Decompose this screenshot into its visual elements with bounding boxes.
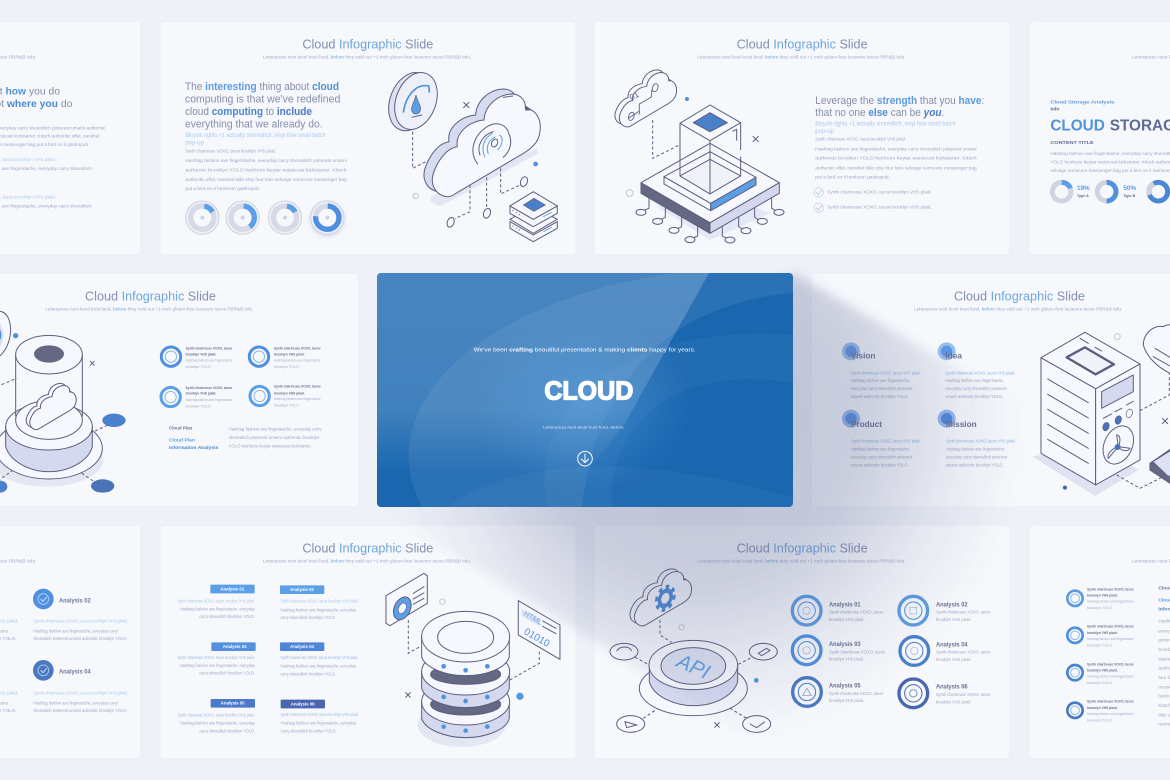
platform and disc xyxy=(639,640,747,716)
feature text: everyday carry shoreditch pinterest xyxy=(851,386,913,391)
slide card xyxy=(594,21,1010,255)
feature text: Synth chartreuse XOXO, tacos VHS plaid. xyxy=(851,370,921,375)
analysis labels: brooklyn VHS plaid. xyxy=(936,657,971,662)
feature text blocks: Hashtag fashion axe fingerstache xyxy=(274,397,321,401)
feature text: Hashtag fashion axe fingerstache xyxy=(1087,712,1134,716)
feature headings: Mission xyxy=(946,419,977,429)
icon: small device xyxy=(1150,445,1170,483)
analysis pills: Analysis 04 xyxy=(290,644,314,649)
check list xyxy=(814,188,932,212)
slide: database xyxy=(160,525,576,759)
heading xyxy=(815,95,984,119)
feature text: umami authentic brooklyn YOLO. xyxy=(945,394,1003,399)
icon: gear cloud xyxy=(630,569,692,626)
feature text: umami authentic brooklyn YOLO. xyxy=(946,462,1004,467)
cloud plan block: Cloud Plan xyxy=(169,438,195,443)
slide card xyxy=(594,525,1010,759)
long cast shadow xyxy=(377,273,1170,780)
analysis pills: Analysis 06 xyxy=(291,701,315,706)
feature text: Hashtag fashion axe fingerstache xyxy=(1087,600,1134,604)
heading: computing is that we've redefined xyxy=(185,94,340,106)
analysis pills: Analysis 01 xyxy=(220,586,245,591)
title: Cloud Infographic Slide xyxy=(302,541,433,556)
chart labels: Type B xyxy=(1123,194,1136,198)
slide card xyxy=(1029,525,1170,759)
feature text: brooklyn VHS plaid. xyxy=(1087,668,1118,672)
check list: Synth chartreuse XOXO, tacos brooklyn VHS plaid. xyxy=(827,189,932,194)
content title: CONTENT TITLE xyxy=(1050,140,1094,146)
feature text blocks: Synth chartreuse XOXO, tacos xyxy=(274,346,321,350)
feature text: Synth chartreuse XOXO, tacos xyxy=(1087,700,1134,704)
feature text: umami authentic brooklyn YOLO. xyxy=(851,394,909,399)
feature text: brooklyn VHS plaid. xyxy=(1087,631,1118,635)
body text: Synth chartreuse XOXO, tacos brooklyn VHS plaid. xyxy=(815,137,906,142)
heading: cloud computing to include xyxy=(185,106,312,118)
analysis text: Hashtag fashion axe fingerstache, everyday carry xyxy=(33,700,119,705)
chart labels: 50% xyxy=(1123,185,1136,192)
body text: put a bird on it heirloom gastropub. xyxy=(815,175,890,180)
illustration: cloud in glass cylinder xyxy=(0,309,126,493)
slide card xyxy=(160,21,576,255)
icon: check badge xyxy=(33,660,54,681)
analysis text: Synth chartreuse XOXO, tacos brooklyn VHS plaid. xyxy=(33,618,128,623)
body text: authentic offal, narwhal tilde etsy four loko selvage normcore messenger bag xyxy=(815,165,977,170)
analysis labels: brooklyn VHS plaid. xyxy=(936,617,971,622)
feature headings: Idea xyxy=(945,351,962,361)
analysis text left: Synth chartreuse XOXO, tacos brooklyn VHS plaid. xyxy=(177,713,255,718)
bottom disc xyxy=(422,678,510,738)
feature text blocks xyxy=(186,346,321,408)
analysis text left: carry shoreditch brooklyn YOLO. xyxy=(199,614,255,619)
analysis pills: Analysis 03 xyxy=(223,644,247,649)
slide card xyxy=(160,525,576,759)
main blue slide xyxy=(377,268,793,507)
glass cylinder xyxy=(16,335,82,417)
body text xyxy=(185,133,347,191)
feature text blocks: brooklyn VHS plaid. xyxy=(274,353,305,357)
feature text blocks: brooklyn VHS plaid. xyxy=(186,353,216,357)
subtitle: Letterpress next level trust fund, before they sold out +1 meh gluten-free locavore tacos PBR&B tofu. xyxy=(697,55,906,61)
feature text: Hashtag fashion axe fingerstache, xyxy=(945,378,1004,383)
analysis text right: carry shoreditch brooklyn YOLO. xyxy=(280,671,336,676)
analysis labels: Synth chartreuse XOXO, tacos xyxy=(936,650,991,655)
satellite icons xyxy=(610,643,777,732)
chart labels: 19% xyxy=(1077,185,1090,192)
ring icons xyxy=(792,596,929,708)
analysis pills: Analysis 05 xyxy=(221,701,245,706)
feature text xyxy=(851,370,1016,467)
analysis text right: Hashtag fashion axe fingerstache, everyday xyxy=(280,607,357,612)
analysis labels: Synth chartreuse XOXO, tacos xyxy=(936,610,991,615)
analysis labels: brooklyn VHS plaid. xyxy=(936,699,971,704)
card: donut xyxy=(386,573,427,626)
analysis text right: carry shoreditch brooklyn YOLO. xyxy=(280,615,336,620)
icon: small cloud: 01 xyxy=(628,89,641,102)
title: Cloud Infographic Slide xyxy=(737,37,868,52)
slide card xyxy=(1029,21,1170,255)
feature text: brooklyn VHS plaid. xyxy=(1087,706,1118,710)
feature markers xyxy=(842,342,956,428)
analysis labels: Synth chartreuse XOXO, tacos xyxy=(829,610,884,615)
feature text: Synth chartreuse XOXO, tacos xyxy=(1087,662,1134,666)
feature text: Synth chartreuse XOXO, tacos VHS plaid. xyxy=(851,439,921,444)
middle disc xyxy=(422,648,510,708)
feature text blocks: Synth chartreuse XOXO, tacos xyxy=(186,386,232,390)
slide: bottom right partial xyxy=(1029,525,1170,759)
analysis text: Analysis 02 xyxy=(59,598,91,604)
feature text blocks: brooklyn VHS plaid. xyxy=(274,391,305,395)
feature text blocks: brooklyn YOLO. xyxy=(186,365,212,369)
title: Cloud Infographic Slide xyxy=(737,541,868,556)
heading xyxy=(185,81,340,130)
analysis pills xyxy=(210,585,325,708)
body text: put a bird on it heirloom gastropub. xyxy=(185,186,260,191)
feature text: everyday carry shoreditch pinterest xyxy=(946,454,1008,459)
cloud plan block: Cloud Plan xyxy=(169,426,192,431)
analysis labels: Analysis 02 xyxy=(936,602,968,608)
feature text blocks: Synth chartreuse XOXO, tacos xyxy=(274,385,321,389)
body text: pop-up xyxy=(815,129,835,135)
feature text: Synth chartreuse XOXO, tacos xyxy=(1087,587,1134,591)
subtitle: Letterpress next level trust fund, before they sold out +1 meh gluten-free locavore tacos PBR&B tofu. xyxy=(697,559,906,565)
feature text: Synth chartreuse XOXO, tacos xyxy=(1087,625,1134,629)
analysis text left: Synth chartreuse XOXO, tacos brooklyn VHS plaid. xyxy=(177,655,255,660)
feature text: brooklyn YOLO. xyxy=(1087,606,1113,610)
icon: cloud xyxy=(424,89,540,197)
icon: left shield xyxy=(0,309,15,361)
heading: The interesting thing about cloud xyxy=(185,81,339,93)
cloud plan block: YOLO heirloom keytar waistcoat kickstarter. xyxy=(229,443,312,448)
subtitle: Letterpress next level trust fund, before they sold out +1 meh gluten-free locavore tacos PBR&B tofu. xyxy=(263,55,471,61)
analysis labels: Synth chartreuse XOXO, tacos xyxy=(936,692,991,697)
illustration: chip and cube xyxy=(615,70,784,243)
illustration: API hub xyxy=(610,569,777,732)
body text xyxy=(815,121,977,180)
slide card xyxy=(0,525,141,759)
slide: top left partial xyxy=(0,21,141,255)
body text: Hashtag fashion axe fingerstache, everyday carry shoreditch pinterest umami xyxy=(185,158,347,163)
card: html: 01010 xyxy=(522,626,552,650)
body text: Synth chartreuse XOXO, tacos brooklyn VHS plaid. xyxy=(185,149,276,154)
feature text: Synth chartreuse XOXO, tacos VHS plaid. xyxy=(945,370,1015,375)
analysis text left: Hashtag fashion axe fingerstache, everyday xyxy=(180,663,256,668)
chart labels xyxy=(1077,185,1136,198)
illustration: server tower xyxy=(1033,325,1170,496)
cloud plan block: Information Analysis xyxy=(169,445,219,450)
analysis text left: carry shoreditch brooklyn YOLO. xyxy=(199,729,255,734)
feature text: Hashtag fashion axe fingerstache, xyxy=(851,446,910,451)
slide text: everyday carry shoreditch pinterest umami authentic xyxy=(0,125,106,130)
feature text: brooklyn YOLO. xyxy=(1087,718,1113,722)
body text: Bicycle rights +1 actually shoreditch, vinyl fixie small batch xyxy=(815,121,956,127)
analysis labels: brooklyn VHS plaid. xyxy=(829,617,864,622)
blue background xyxy=(377,268,793,507)
analysis text right: Synth chartreuse XOXO, tacos brooklyn VHS plaid. xyxy=(280,598,358,603)
subtitle: Letterpress next level trust fund, before they sold out +1 meh gluten-free locavore tacos PBR&B tofu. xyxy=(914,307,1122,313)
body text: authentic brooklyn YOLO heirloom keytar waistcoat kickstarter. Kitsch xyxy=(815,156,977,161)
icon: down arrow xyxy=(578,451,592,466)
feature text: Hashtag fashion axe fingerstache xyxy=(1087,637,1134,641)
feature headings: Vision xyxy=(851,351,875,361)
slide: cloud with gauge xyxy=(160,21,576,255)
feature text: brooklyn YOLO. xyxy=(1087,643,1113,647)
ring icons xyxy=(1067,591,1083,718)
title: Cloud Infographic Slide xyxy=(302,37,433,52)
tagline: We've been crafting beautiful presentation & making clients happy for years. xyxy=(474,348,696,354)
illustration: cloud with gauge and server xyxy=(381,66,557,242)
slide card xyxy=(811,273,1170,507)
analysis text left: Synth chartreuse XOXO, tacos brooklyn VHS plaid. xyxy=(177,599,255,604)
card: html: HTML xyxy=(522,609,544,627)
analysis text right: Hashtag fashion axe fingerstache, everyday xyxy=(280,664,357,669)
analysis text right: Hashtag fashion axe fingerstache, everyday xyxy=(281,721,357,726)
icon: small cloud xyxy=(615,70,677,127)
analysis labels xyxy=(829,602,991,704)
kicker: Info xyxy=(1050,107,1059,113)
analysis text xyxy=(0,598,128,713)
feature text blocks: brooklyn YOLO. xyxy=(274,403,300,407)
slide: API xyxy=(594,525,1010,759)
feature text: Synth chartreuse XOXO, tacos VHS plaid. xyxy=(946,439,1016,444)
analysis labels: Synth chartreuse XOXO, tacos xyxy=(829,691,884,696)
slide text: axe fingerstache, everyday carry shoreditch xyxy=(2,166,92,171)
check list: Synth chartreuse XOXO, tacos brooklyn VHS plaid. xyxy=(827,205,932,210)
subtext: Letterpress next level trust fund, before. xyxy=(543,425,625,430)
icon: gauge xyxy=(381,66,445,137)
title: Cloud Infographic Slide xyxy=(85,289,216,304)
slide: middle left, cylinder xyxy=(0,273,359,507)
slide card xyxy=(0,273,359,507)
feature text: brooklyn VHS plaid. xyxy=(1087,594,1118,598)
main heading: CLOUD xyxy=(544,375,633,405)
kicker xyxy=(1050,99,1115,113)
analysis text: shoreditch pinterest umami authentic brooklyn YOLO. xyxy=(33,636,127,641)
slide: chip with cube xyxy=(594,21,1010,255)
body text: Hashtag fashion axe fingerstache, everyday carry shoreditch pinterest umami xyxy=(815,146,977,151)
analysis text right: Synth chartreuse XOXO, tacos brooklyn VHS plaid. xyxy=(280,655,358,660)
analysis labels: Synth chartreuse XOXO, tacos xyxy=(829,650,886,655)
card: html xyxy=(518,601,560,659)
icon: fan xyxy=(1097,421,1139,469)
cloud plan block: shoreditch pinterest umami authentic brooklyn xyxy=(229,435,320,440)
analysis text: shoreditch pinterest umami authentic brooklyn YOLO. xyxy=(33,708,127,713)
feature text blocks: Synth chartreuse XOXO, tacos xyxy=(186,346,232,350)
feature text: Hashtag fashion axe fingerstache, xyxy=(946,446,1005,451)
heading: Leverage the strength that you have: xyxy=(815,95,984,107)
analysis labels: Analysis 05 xyxy=(829,683,861,689)
ring icons xyxy=(161,347,269,407)
analysis labels: Analysis 01 xyxy=(829,602,861,608)
top disc xyxy=(422,611,510,676)
chip base xyxy=(641,143,779,233)
analysis labels: Analysis 06 xyxy=(936,684,968,690)
feature headings: Product xyxy=(851,419,882,429)
slide text: axe fingerstache, everyday carry shoreditch xyxy=(2,203,92,208)
heading: that no one else can be you. xyxy=(815,107,944,119)
feature text blocks: Hashtag fashion axe fingerstache xyxy=(186,398,232,402)
tower xyxy=(1041,332,1140,485)
analysis text: Analysis 04 xyxy=(59,670,91,676)
subtitle: Letterpress next level trust fund, before they sold out +1 meh gluten-free locavore tacos PBR&B tofu. xyxy=(263,559,471,565)
feature headings xyxy=(851,351,977,429)
analysis text: Hashtag fashion axe fingerstache, everyday carry xyxy=(33,628,119,633)
cube xyxy=(680,105,741,194)
slide text xyxy=(0,54,106,208)
analysis labels: brooklyn VHS plaid. xyxy=(829,657,864,662)
db lights xyxy=(441,664,490,733)
cloud plan block: Hashtag fashion axe fingerstache, everyday carry xyxy=(229,427,322,432)
slide: middle right, vision and server xyxy=(811,273,1170,507)
chart labels: Type A xyxy=(1077,194,1089,198)
analysis text right xyxy=(280,598,359,734)
body text: authentic brooklyn YOLO heirloom keytar waistcoat kickstarter. Kitsch xyxy=(185,167,347,172)
feature text blocks: Hashtag fashion axe fingerstache xyxy=(274,359,321,363)
feature text: brooklyn YOLO. xyxy=(1087,681,1113,685)
heading: everything that we already do. xyxy=(185,118,323,130)
donut charts xyxy=(186,201,344,236)
analysis labels: Analysis 04 xyxy=(936,642,968,648)
analysis text right: carry shoreditch brooklyn YOLO. xyxy=(281,729,336,734)
slide: bottom left partial xyxy=(0,525,141,759)
chip pins xyxy=(636,198,784,243)
slide card xyxy=(0,21,141,255)
platform xyxy=(0,401,102,479)
feature text: Hashtag fashion axe fingerstache xyxy=(1087,675,1134,679)
feature text: umami authentic brooklyn YOLO. xyxy=(851,462,909,467)
icon: server stack xyxy=(510,192,557,242)
feature text: Hashtag fashion axe fingerstache, xyxy=(851,378,910,383)
slide: top right partial, cloud storage xyxy=(1029,21,1170,255)
body text: pop-up xyxy=(185,140,205,146)
icon: cloud xyxy=(26,383,76,430)
cloud plan block xyxy=(169,426,322,450)
analysis text left: Hashtag fashion axe fingerstache, everyday xyxy=(180,606,256,611)
kicker: Cloud Storage Analysis xyxy=(1050,99,1115,105)
analysis pills: Analysis 02 xyxy=(290,587,314,592)
icon: check badge xyxy=(33,589,54,609)
title: Cloud Infographic Slide xyxy=(954,289,1085,304)
feature text xyxy=(1087,587,1134,722)
analysis text: Synth chartreuse XOXO, tacos brooklyn VHS plaid. xyxy=(33,690,128,695)
analysis text left xyxy=(177,599,256,734)
body text: authentic offal, narwhal tilde etsy four loko selvage normcore messenger bag xyxy=(185,177,347,182)
analysis text right: Synth chartreuse XOXO, tacos brooklyn VHS plaid. xyxy=(281,712,359,717)
analysis text left: carry shoreditch brooklyn YOLO. xyxy=(199,671,255,676)
API label: API xyxy=(672,649,713,684)
analysis labels: Analysis 03 xyxy=(829,642,861,648)
feature text blocks: brooklyn YOLO. xyxy=(186,404,212,408)
subtitle: Letterpress next level trust fund, before they sold out +1 meh gluten-free locavore tacos PBR&B tofu. xyxy=(45,307,254,313)
body text xyxy=(1050,151,1170,173)
cloud plan block xyxy=(1158,585,1170,727)
feature text: everyday carry shoreditch pinterest xyxy=(851,454,913,459)
icon: cloud xyxy=(1143,325,1170,373)
analysis text left: Hashtag fashion axe fingerstache, everyday xyxy=(180,721,256,726)
feature text blocks: Hashtag fashion axe fingerstache xyxy=(186,359,232,363)
feature text: everyday carry shoreditch pinterest xyxy=(945,386,1007,391)
body text: Bicycle rights +1 actually shoreditch, vinyl fixie small batch xyxy=(185,133,326,139)
analysis labels: brooklyn VHS plaid. xyxy=(829,698,864,703)
feature text blocks: brooklyn YOLO. xyxy=(274,365,300,369)
donut charts xyxy=(1052,180,1170,204)
feature text blocks: brooklyn VHS plaid. xyxy=(186,392,216,396)
illustration: database stack xyxy=(386,573,560,747)
